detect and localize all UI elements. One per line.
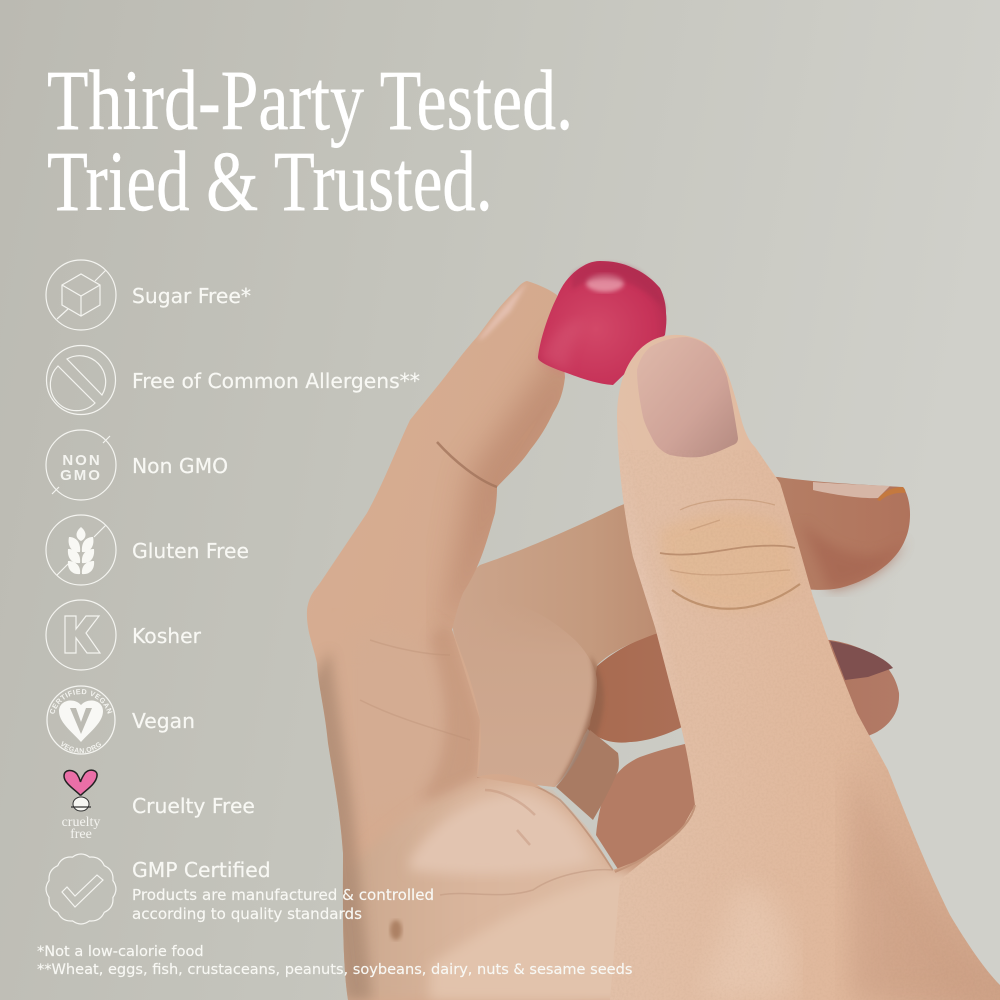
- text: gmp description: according to quality standards: [132, 905, 362, 923]
- middle finger nail: [813, 482, 890, 498]
- title: Third-Party Tested.: [47, 52, 573, 148]
- label: vegan: Vegan: [132, 709, 195, 733]
- title: [47, 52, 573, 229]
- ring finger nail: [830, 641, 893, 680]
- left edge shadow: [318, 654, 374, 1000]
- index crease: [437, 442, 497, 487]
- label: non gmo: Non GMO: [132, 454, 228, 478]
- lower knuckle: [556, 730, 619, 820]
- index shading: [345, 628, 480, 830]
- pinky finger: [596, 743, 720, 880]
- text: gmp description: [132, 886, 434, 923]
- icon: kosher: [45, 599, 117, 671]
- label: cruelty free: Cruelty Free: [132, 794, 255, 818]
- icon: certified vegan: VEGAN.ORG: [61, 741, 102, 754]
- ring finger: [575, 632, 899, 770]
- middle finger knuckle: [452, 601, 597, 787]
- middle finger: [452, 476, 910, 787]
- icon: cruelty free: free: [70, 827, 92, 842]
- icon: non gmo: NON: [62, 452, 102, 469]
- skin texture: [600, 450, 1000, 1000]
- mole: [390, 920, 402, 940]
- label: gluten free: Gluten Free: [132, 539, 249, 563]
- palm and index finger: [307, 281, 680, 1000]
- label: kosher: Kosher: [132, 624, 201, 648]
- palm crease: [440, 870, 613, 895]
- icon: gluten free: [45, 514, 117, 586]
- icon: non gmo: GMO: [60, 467, 102, 484]
- index tip highlight: [480, 286, 524, 340]
- footnotes: *Not a low-calorie food: [37, 943, 204, 960]
- text: gmp description: Products are manufactured & controlled: [132, 886, 434, 904]
- icon: certified vegan: CERTIFIED VEGAN: [50, 689, 112, 714]
- label: gmp certified: GMP Certified: [132, 858, 271, 882]
- icon: non gmo: [45, 429, 117, 501]
- thumb: [610, 335, 1000, 1000]
- icon: cruelty free: cruelty: [62, 815, 100, 830]
- thumb web crease: [615, 805, 695, 872]
- gummy: [538, 261, 666, 385]
- back fingers: [452, 476, 910, 880]
- palm shade under thumb web: [477, 776, 613, 870]
- thumb knuckle wrinkles: [662, 515, 791, 607]
- footnotes: **Wheat, eggs, fish, crustaceans, peanuts, soybeans, dairy, nuts & sesame seeds: [37, 961, 632, 978]
- icon: cruelty free: [62, 769, 100, 842]
- label: allergens: Free of Common Allergens**: [132, 369, 420, 393]
- footnotes: [37, 943, 632, 978]
- label: sugar free: Sugar Free*: [132, 284, 251, 308]
- thumb nail: [637, 337, 738, 457]
- icon: certified vegan: [46, 685, 116, 755]
- palm: [343, 780, 625, 1000]
- icon: gmp badge: [46, 853, 116, 925]
- title: Tried & Trusted.: [47, 133, 493, 229]
- icon: sugar free: [45, 259, 117, 331]
- icon: allergens: [46, 344, 116, 416]
